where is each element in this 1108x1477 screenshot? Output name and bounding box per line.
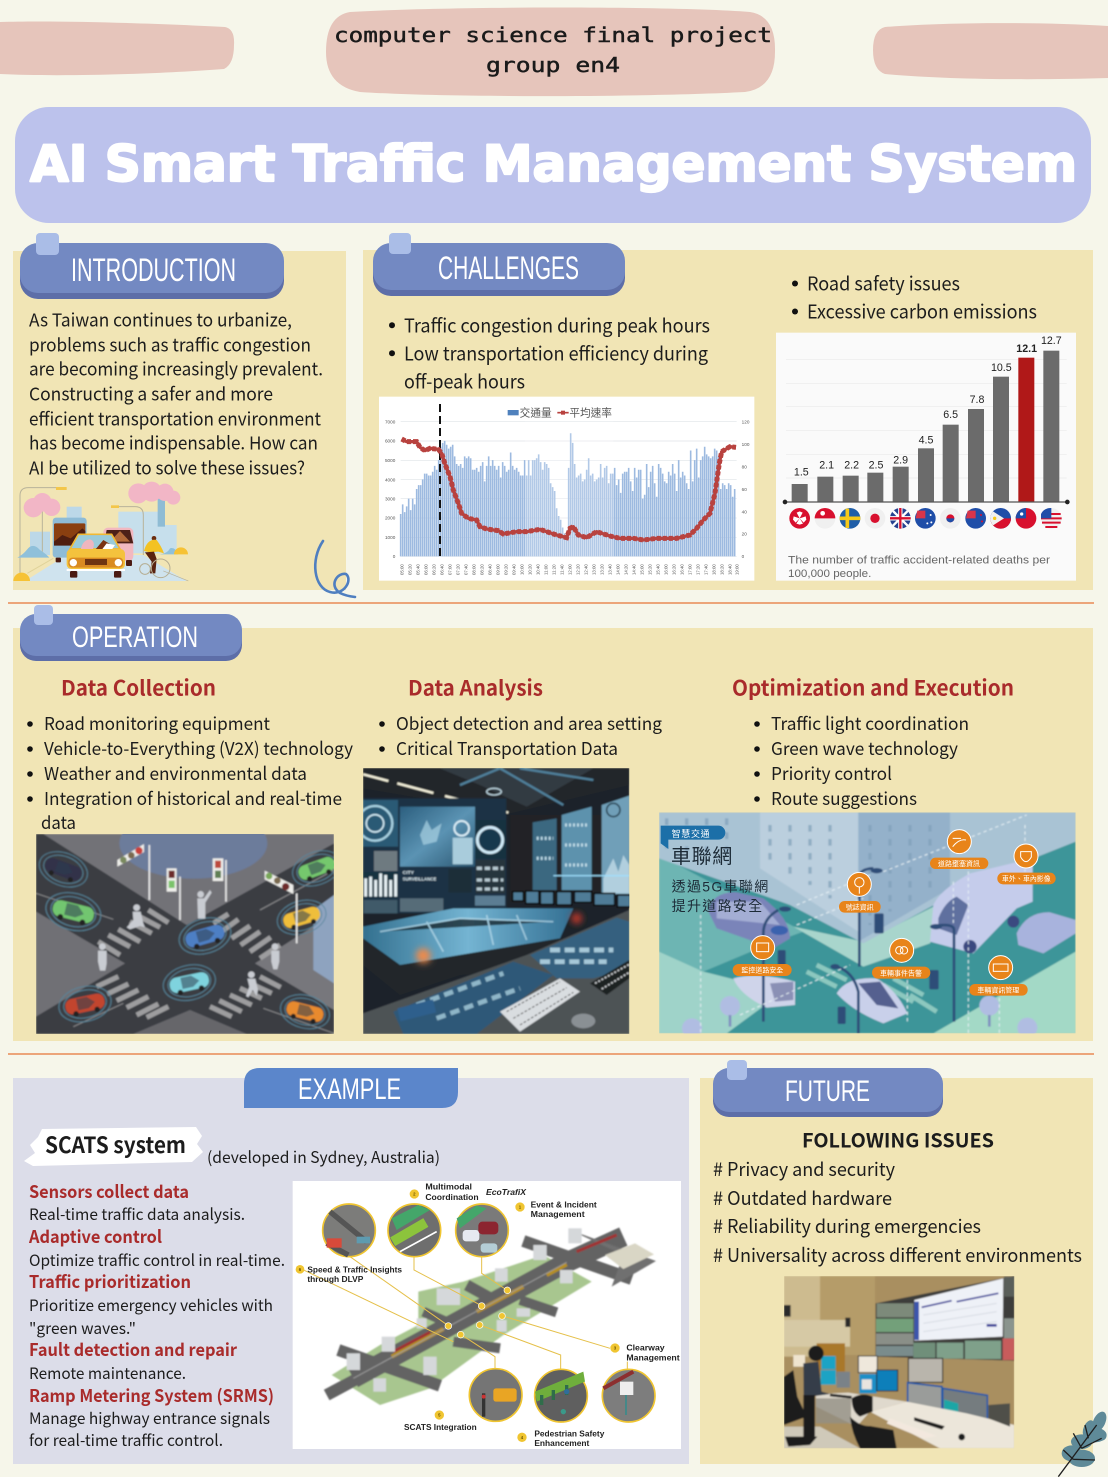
time axis: 07:20 xyxy=(456,564,461,575)
introduction text: has become indispensable. How can xyxy=(29,429,318,455)
issue list: # Outdated hardware xyxy=(713,1184,892,1211)
time axis: 05:40 xyxy=(416,564,421,575)
feature list: Real-time traffic data analysis. xyxy=(29,1202,245,1225)
panel: challenges xyxy=(363,233,1093,590)
time axis: 18:20 xyxy=(720,564,725,575)
left axis: 0 xyxy=(393,554,396,559)
orange service markers: 車輛資訊管理 xyxy=(977,985,1019,994)
roads xyxy=(327,1237,632,1395)
heading: introduction xyxy=(20,233,284,299)
main wall screens xyxy=(363,798,506,913)
column: data collection: Data Collection xyxy=(61,672,216,702)
introduction text: are becoming increasingly prevalent. xyxy=(29,355,323,381)
diagram labels: Pedestrian Safety xyxy=(534,1429,605,1438)
bar values: 2.2 xyxy=(844,460,859,472)
line: average speed xyxy=(402,439,736,540)
chart caption: 100,000 people. xyxy=(788,568,871,580)
time axis: 08:20 xyxy=(480,564,485,575)
time axis: 13:40 xyxy=(608,564,613,575)
image heading: 車聯網 xyxy=(671,845,733,868)
time axis: 15:00 xyxy=(640,564,645,575)
banner line 1: computer science final project xyxy=(334,23,772,47)
feature list: Optimize traffic control in real-time. xyxy=(29,1248,285,1271)
chart legend: 交通量 xyxy=(520,407,552,420)
left axis: 7000 xyxy=(385,419,396,424)
chart caption: The number of traffic accident-related deaths per xyxy=(788,554,1050,566)
callout lines xyxy=(297,1257,627,1370)
heading: challenges xyxy=(373,233,625,296)
bullet list: data analysis xyxy=(379,710,662,761)
diagram: SCATS smart corridor: 4 xyxy=(521,1435,524,1440)
time axis: 13:20 xyxy=(600,564,605,575)
image: city surveillance control room: SURVEILLANCE xyxy=(403,876,436,881)
chart: traffic deaths per 100,000 people xyxy=(776,333,1076,581)
diagram labels: Management xyxy=(626,1354,680,1363)
brand logo: EcoTrafiX xyxy=(486,1187,527,1197)
right axis: 100 xyxy=(742,442,750,447)
bars: traffic volume xyxy=(401,433,735,556)
decorative leaf xyxy=(1058,1409,1108,1477)
top decorative blob: left xyxy=(0,21,234,75)
time axis: 11:00 xyxy=(544,564,549,575)
diagram labels: through DLVP xyxy=(307,1275,364,1284)
introduction text: AI be utilized to solve these issues? xyxy=(29,454,305,480)
heading: example: EXAMPLE xyxy=(298,1073,401,1106)
diagram labels: Speed & Traffic Insights xyxy=(307,1265,402,1274)
bar values: 1.5 xyxy=(794,466,809,478)
left axis: 2000 xyxy=(385,516,396,521)
introduction text: problems such as traffic congestion xyxy=(29,331,311,357)
side windows with data xyxy=(524,892,594,902)
heading: future xyxy=(713,1060,943,1117)
time axis: 15:20 xyxy=(648,564,653,575)
diagram: SCATS smart corridor: 3 xyxy=(614,1346,617,1351)
video wall xyxy=(876,1276,1014,1361)
illustration: street scene xyxy=(13,482,188,581)
bar values: 2.9 xyxy=(893,454,908,466)
image: city surveillance control room xyxy=(358,768,631,1034)
left axis: 6000 xyxy=(385,439,396,444)
diagram labels xyxy=(307,1183,680,1448)
title: AI Smart Traffic Management System xyxy=(30,135,1077,193)
diagram labels: SCATS Integration xyxy=(404,1423,477,1432)
heading: introduction: INTRODUCTION xyxy=(71,252,236,288)
divider xyxy=(8,603,1094,1054)
traffic lights xyxy=(117,844,297,943)
bullet list: safety and emissions: Road safety issues xyxy=(807,270,960,296)
introduction text: efficient transportation environment xyxy=(29,405,321,431)
right axis: 120 xyxy=(742,419,750,424)
image subtitle: 透過5G車聯網 xyxy=(672,879,770,895)
panel: operation xyxy=(13,605,1093,1041)
image: city surveillance control room: CITY xyxy=(403,870,415,876)
chart legend: 平均速率 xyxy=(569,407,612,420)
bullet list: congestion and efficiency: off-peak hours xyxy=(404,367,525,394)
time axis: 06:20 xyxy=(432,564,437,575)
time axis: 18:00 xyxy=(712,564,717,575)
column: data analysis: Data Analysis xyxy=(408,672,543,702)
time axis: 05:00 xyxy=(400,564,405,575)
column: optimization and execution xyxy=(659,672,1076,1038)
bullet list: data analysis: Object detection and area setting xyxy=(396,710,662,736)
bar values: 2.1 xyxy=(819,460,834,472)
orange service markers: 監控道路安全 xyxy=(741,966,783,975)
panel: future xyxy=(700,1060,1093,1464)
bullet list: congestion and efficiency xyxy=(389,311,710,394)
following issues heading: FOLLOWING ISSUES xyxy=(802,1124,994,1154)
left axis: 3000 xyxy=(385,496,396,501)
series banner: 智慧交通 xyxy=(672,828,710,839)
image: connected vehicles xyxy=(659,812,1076,1038)
time axis: 11:40 xyxy=(560,564,565,575)
left axis: 4000 xyxy=(385,477,396,482)
time axis: 12:00 xyxy=(568,564,573,575)
orange service markers: 道路壅塞資訊 xyxy=(938,859,980,868)
feature list: Manage highway entrance signals xyxy=(29,1406,270,1429)
time axis: 17:40 xyxy=(704,564,709,575)
time axis: 14:40 xyxy=(632,564,637,575)
time axis: 10:40 xyxy=(536,564,541,575)
bar values: 4.5 xyxy=(919,435,933,447)
diagram: SCATS smart corridor: 1 xyxy=(519,1205,522,1210)
introduction text xyxy=(29,306,323,480)
traffic on main road xyxy=(392,1264,567,1357)
bar display xyxy=(364,876,365,877)
number badges xyxy=(296,1189,620,1442)
system name: SCATS system xyxy=(45,1128,186,1160)
right axis: 80 xyxy=(742,464,747,469)
issue list: # Privacy and security xyxy=(713,1155,895,1182)
time axis: 08:00 xyxy=(472,564,477,575)
bar values: 10.5 xyxy=(991,362,1012,374)
operator xyxy=(808,1346,824,1361)
feature list: Fault detection and repair xyxy=(29,1336,237,1361)
chart legend xyxy=(508,407,612,420)
chart caption xyxy=(788,554,1050,580)
time axis: 16:20 xyxy=(672,564,677,575)
time axis: 14:00 xyxy=(616,564,621,575)
time axis: 10:00 xyxy=(520,564,525,575)
right axis xyxy=(742,419,750,559)
vehicles xyxy=(708,892,790,948)
dashed marker line xyxy=(437,404,443,556)
chart: traffic volume and average speed xyxy=(379,397,754,581)
time axis: 19:00 xyxy=(735,564,740,575)
heading: example xyxy=(244,1068,458,1108)
left axis: 5000 xyxy=(385,458,396,463)
column: optimization and execution: Optimization and Execution xyxy=(732,672,1014,702)
ceiling lights xyxy=(363,774,508,813)
desks xyxy=(816,1393,907,1427)
column: data analysis xyxy=(358,672,662,1034)
orange service markers xyxy=(733,830,1056,996)
street lamps xyxy=(763,868,954,1033)
bullet list: congestion and efficiency: Traffic congestion during peak hours xyxy=(404,311,710,338)
crosswalks xyxy=(807,965,937,1012)
diagram labels: Multimodal xyxy=(425,1183,472,1192)
lens views xyxy=(323,1204,655,1422)
dashed links xyxy=(701,815,1027,1033)
right axis: 0 xyxy=(742,554,745,559)
numbered nodes on corridor xyxy=(445,1287,511,1338)
bullet list: optimization: Green wave technology xyxy=(771,735,959,761)
diagram labels: Management xyxy=(531,1210,585,1219)
feature list: Traffic prioritization xyxy=(29,1268,191,1293)
heading: operation xyxy=(20,605,242,661)
holographic map table xyxy=(363,908,573,965)
time axis: 07:00 xyxy=(448,564,453,575)
bullet list: data collection: Road monitoring equipment xyxy=(44,710,270,736)
keyboards xyxy=(500,978,580,1032)
bullet list: optimization: Traffic light coordination xyxy=(771,710,969,736)
front consoles xyxy=(363,910,629,1034)
time axis: 12:20 xyxy=(576,564,581,575)
time axis: 09:40 xyxy=(512,564,517,575)
heading: future: FUTURE xyxy=(785,1075,870,1108)
bar values: 7.8 xyxy=(970,394,984,406)
time axis: 10:20 xyxy=(528,564,533,575)
crosswalk stripes xyxy=(97,910,281,1017)
bullet list: optimization xyxy=(754,710,969,811)
time axis: 05:20 xyxy=(408,564,413,575)
time axis: 17:00 xyxy=(688,564,693,575)
diagram: SCATS smart corridor: 5 xyxy=(438,1413,441,1418)
bar values: 12.7 xyxy=(1041,335,1062,347)
time axis: 06:00 xyxy=(424,564,429,575)
vehicles xyxy=(34,844,346,1034)
image subtitle xyxy=(672,879,770,914)
time axis: 11:20 xyxy=(552,564,557,575)
heading: challenges: CHALLENGES xyxy=(438,250,579,286)
pedestrians xyxy=(98,890,279,997)
ground surfaces xyxy=(659,855,803,972)
bullet list: optimization: Route suggestions xyxy=(771,785,917,811)
diagram labels: Event & Incident xyxy=(531,1200,597,1209)
bullet list: data analysis: Critical Transportation Data xyxy=(396,735,618,761)
time axis: 07:40 xyxy=(464,564,469,575)
bullet list: data collection: data xyxy=(41,809,76,835)
diagram: SCATS smart corridor: 2 xyxy=(413,1192,416,1197)
time axis: 08:40 xyxy=(488,564,493,575)
bar values: 6.5 xyxy=(943,409,958,421)
brush stroke highlight xyxy=(24,1127,203,1166)
time axis: 16:00 xyxy=(664,564,669,575)
bars xyxy=(792,351,1059,502)
right axis: 60 xyxy=(742,487,747,492)
introduction text: As Taiwan continues to urbanize, xyxy=(29,306,292,332)
bar values xyxy=(794,335,1062,478)
issue list: # Reliability during emergencies xyxy=(713,1212,981,1239)
right axis: 20 xyxy=(742,532,747,537)
bullet list: data collection: Weather and environmental data xyxy=(44,760,307,786)
issue list xyxy=(713,1155,1082,1268)
time axis: 13:00 xyxy=(592,564,597,575)
orange service markers: 車外、車內影像 xyxy=(1002,874,1051,883)
decorative squiggle xyxy=(315,541,355,597)
bullet list: safety and emissions: Excessive carbon emissions xyxy=(807,298,1037,324)
project banner xyxy=(326,8,775,96)
corridor base xyxy=(327,1228,656,1405)
time axis: 06:40 xyxy=(440,564,445,575)
blocks xyxy=(347,1228,582,1392)
feature list: "green waves." xyxy=(29,1316,136,1339)
feature list: for real-time traffic control. xyxy=(29,1428,223,1451)
feature list: Prioritize emergency vehicles with xyxy=(29,1293,273,1316)
orange service markers: 車輛事件告警 xyxy=(880,968,922,977)
chairs xyxy=(784,1370,897,1448)
operator monitors xyxy=(793,1355,805,1367)
trees xyxy=(682,996,1038,1034)
diagram labels: Enhancement xyxy=(534,1439,590,1448)
diagram: SCATS smart corridor: 6 xyxy=(299,1267,302,1272)
right axis: 40 xyxy=(742,510,747,515)
bullet list: optimization: Priority control xyxy=(771,760,892,786)
system origin: (developed in Sydney, Australia) xyxy=(207,1144,440,1168)
city buildings xyxy=(659,812,1076,943)
panel: introduction xyxy=(13,233,355,597)
monitor row xyxy=(513,891,631,907)
diagram: SCATS smart corridor xyxy=(293,1181,681,1449)
feature list: Remote maintenance. xyxy=(29,1361,186,1384)
bar values: 2.5 xyxy=(869,460,883,472)
time axis: 14:20 xyxy=(624,564,629,575)
title banner xyxy=(15,107,1091,223)
bullet list: data collection xyxy=(27,710,354,835)
introduction text: Constructing a safer and more xyxy=(29,380,273,406)
issue list: # Universality across different environments xyxy=(713,1241,1082,1268)
diagram labels: Clearway xyxy=(626,1344,665,1353)
left axis xyxy=(385,419,396,559)
photo: traffic control centre xyxy=(784,1276,1014,1448)
time axis: 15:40 xyxy=(656,564,661,575)
feature list: Ramp Metering System (SRMS) xyxy=(29,1382,274,1407)
time axis: 16:40 xyxy=(680,564,685,575)
feature list: Sensors collect data xyxy=(29,1178,189,1203)
orange service markers: 號誌資訊 xyxy=(846,902,874,911)
time axis: 18:40 xyxy=(728,564,733,575)
time axis: 12:40 xyxy=(584,564,589,575)
diagram labels: Coordination xyxy=(425,1193,479,1202)
time axis xyxy=(400,564,740,575)
top decorative blob: right xyxy=(873,23,1108,79)
feature list: Adaptive control xyxy=(28,1223,163,1248)
time axis: 09:00 xyxy=(496,564,501,575)
heading: operation: OPERATION xyxy=(72,621,198,654)
image subtitle: 提升道路安全 xyxy=(672,898,764,914)
bullet list: safety and emissions xyxy=(792,270,1037,324)
time axis: 17:20 xyxy=(696,564,701,575)
country flags xyxy=(789,508,1062,529)
bar values: 12.1 xyxy=(1016,343,1037,355)
bullet list: data collection: Vehicle-to-Everything (V2X) technology xyxy=(44,735,354,761)
column: data collection xyxy=(27,672,354,1034)
left axis: 1000 xyxy=(385,535,396,540)
feature list xyxy=(28,1178,285,1451)
banner line 2: group en4 xyxy=(486,53,620,77)
panel: example xyxy=(13,1068,689,1464)
bullet list: data collection: Integration of historical and real-time xyxy=(44,785,342,811)
series banner xyxy=(661,826,725,849)
bullet list: congestion and efficiency: Low transportation efficiency during xyxy=(404,339,708,366)
time axis: 09:20 xyxy=(504,564,509,575)
image: connected intersection xyxy=(36,834,334,1034)
